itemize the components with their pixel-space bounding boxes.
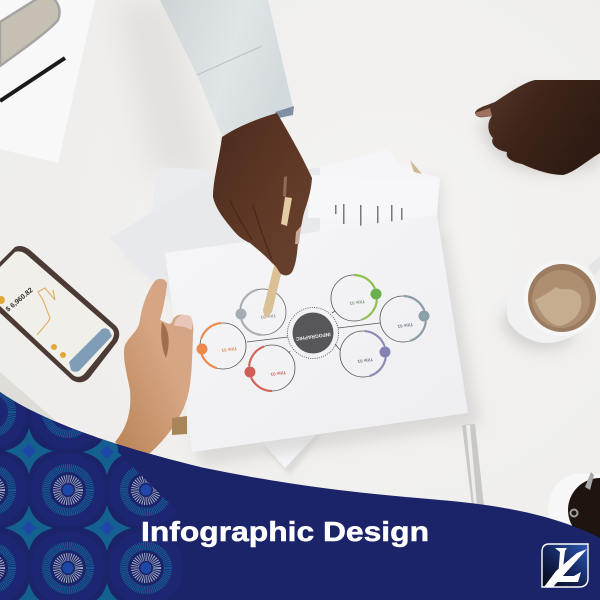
phone balance text: $ 6,960.82 [5, 287, 35, 314]
ring: purple title [340, 329, 390, 377]
ring: green title: Title 01 [349, 299, 365, 306]
holding light hand [115, 279, 193, 454]
logo [542, 544, 588, 587]
main printed infographic sheet [165, 215, 480, 465]
connector lines [247, 311, 380, 353]
centre circle: infographic [288, 308, 338, 358]
ring: grey title: Title 01 [260, 313, 276, 320]
grey box corner [0, 372, 62, 426]
phone [0, 246, 119, 382]
jar and cup [548, 472, 600, 542]
phone button [69, 328, 112, 372]
title: Infographic Design [141, 516, 429, 547]
phone chart line [37, 288, 55, 335]
ring: grey title [236, 289, 286, 336]
ring: orange title [196, 322, 246, 369]
banner pattern [0, 375, 200, 600]
pencil [263, 262, 283, 319]
shirt sleeve [160, 0, 294, 136]
banner [0, 375, 600, 600]
right dark hand [475, 80, 600, 175]
ring: slate title [380, 293, 430, 342]
pencil section between fingers [281, 197, 292, 226]
finger creases [230, 200, 272, 260]
back paper stack [110, 149, 440, 475]
notepad, case and pen [0, 0, 95, 163]
soft desk shadow beside sleeve [115, 0, 210, 190]
ring: green title [331, 272, 382, 321]
ring: red title [244, 345, 295, 394]
silver pen [462, 424, 484, 506]
ring: orange title: Title 01 [221, 346, 237, 353]
coffee mug [500, 256, 600, 350]
ring: slate title: Title 01 [397, 322, 413, 329]
ring: purple title: Title 01 [357, 357, 373, 364]
centre circle: infographic: INFOGRAPHIC [295, 331, 331, 341]
small brown object [172, 416, 187, 435]
document text lines [335, 204, 402, 226]
pattern cut-off edge [118, 444, 200, 510]
pointing dark hand [213, 113, 312, 275]
ring: red title: Title 01 [270, 370, 286, 377]
